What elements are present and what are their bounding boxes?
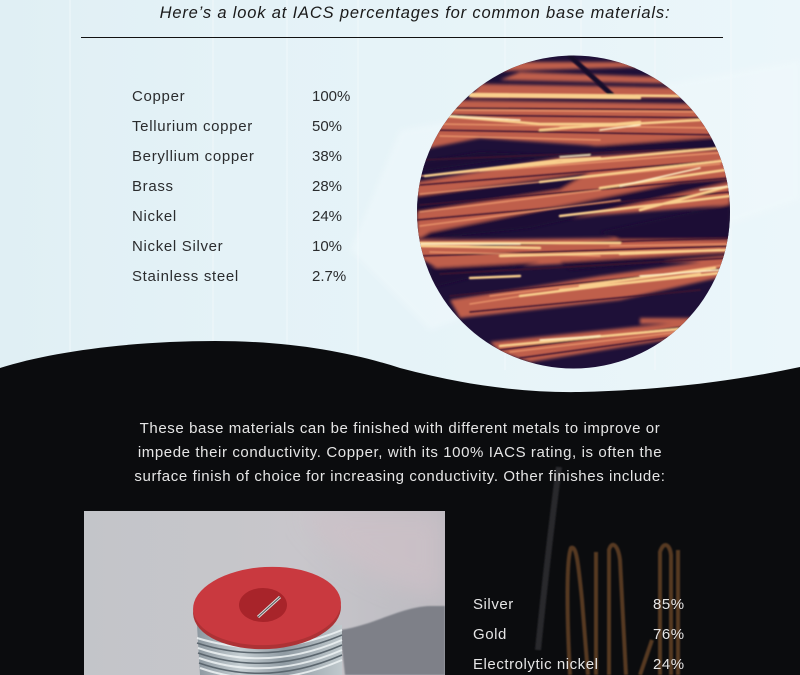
finishes IACS table: 76%: [653, 626, 685, 643]
finishes IACS table: Silver: [473, 596, 514, 613]
dark lower section with wave edge: [0, 341, 800, 675]
photo: solder spool: [84, 511, 445, 675]
finishes IACS table: Gold: [473, 626, 507, 643]
finishes IACS table: Electrolytic nickel: [473, 656, 598, 673]
thin wire strands: [417, 108, 730, 358]
base materials IACS table: 100%: [312, 88, 350, 105]
finishes paragraph: [134, 420, 666, 485]
finishes IACS table: 85%: [653, 596, 685, 613]
base materials IACS table: 2.7%: [312, 268, 346, 285]
finishes IACS table: 24%: [653, 656, 685, 673]
background: light wood planks: [0, 0, 800, 400]
base materials IACS table: Copper: [132, 88, 185, 105]
finishes paragraph: surface finish of choice for increasing conductivity. Other finishes include:: [134, 468, 666, 485]
intro heading: Here’s a look at IACS percentages for common base materials:: [160, 4, 670, 22]
base materials IACS table: 10%: [312, 238, 342, 255]
base materials IACS table: 24%: [312, 208, 342, 225]
circular photo: copper wires: [417, 55, 731, 369]
base materials IACS table: Beryllium copper: [132, 148, 255, 165]
base materials IACS table: Tellurium copper: [132, 118, 253, 135]
base materials IACS table: Nickel: [132, 208, 177, 225]
base materials IACS table: 28%: [312, 178, 342, 195]
bright highlights: [420, 94, 730, 346]
base materials IACS table: Stainless steel: [132, 268, 239, 285]
base materials IACS table: Brass: [132, 178, 174, 195]
base materials IACS table: Nickel Silver: [132, 238, 223, 255]
base materials IACS table: [132, 88, 350, 285]
finishes paragraph: These base materials can be finished with different metals to improve or: [140, 420, 660, 437]
finishes paragraph: impede their conductivity. Copper, with its 100% IACS rating, is often the: [138, 444, 662, 461]
base materials IACS table: 38%: [312, 148, 342, 165]
base materials IACS table: 50%: [312, 118, 342, 135]
finishes IACS table: [473, 596, 685, 673]
